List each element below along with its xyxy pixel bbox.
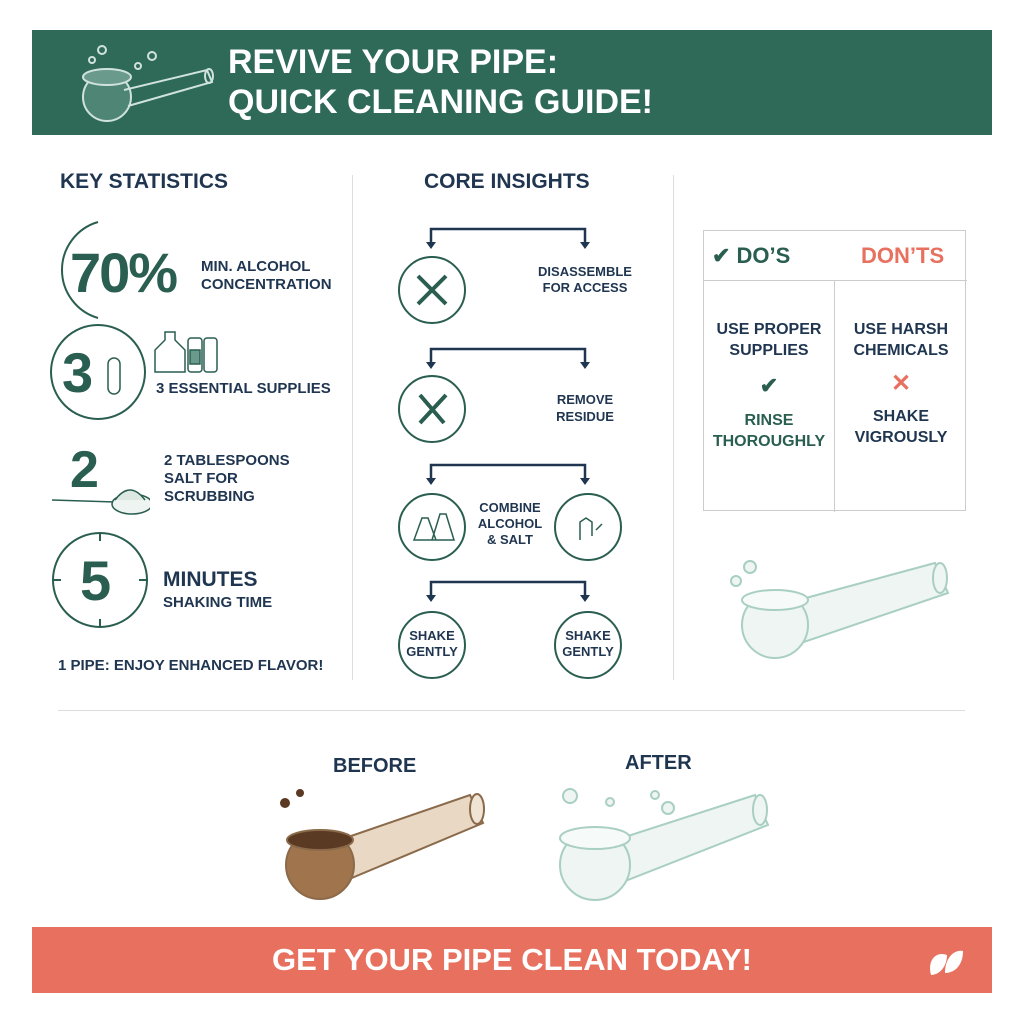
stat: 2 tablespoons: 2 TABLESPOONS [164, 452, 290, 469]
do items: USE PROPER [717, 321, 821, 338]
illustration: dirty pipe [280, 789, 485, 900]
call to action banner [32, 927, 992, 993]
icon: header pipe [82, 45, 214, 122]
flow diagram: RESIDUE [556, 409, 614, 424]
stat: 2 tablespoons: SALT FOR [164, 470, 238, 487]
stat: 5 minutes: 5 [80, 549, 111, 612]
stat: 70%: MIN. ALCOHOL [201, 258, 310, 275]
panel: before/after [280, 752, 770, 901]
illustration: clean pipe [559, 788, 770, 901]
title [228, 43, 653, 121]
stat: 2 tablespoons [52, 441, 290, 515]
label: after: AFTER [625, 752, 692, 774]
don't items: VIGROUSLY [855, 429, 947, 446]
stat: 3 supplies [50, 324, 331, 420]
stat: 70% [61, 221, 332, 319]
heading: do's: ✔ DO’S [712, 243, 790, 268]
panel: core insights [398, 170, 632, 679]
do items: SUPPLIES RINSE [729, 342, 809, 429]
illustration: clean pipe right [730, 560, 950, 659]
stat: 2 tablespoons: SCRUBBING [164, 488, 255, 505]
flow diagram: REMOVE [557, 392, 613, 407]
flow diagram: COMBINE [479, 500, 541, 515]
don't items [853, 321, 949, 446]
panel: do's and don'ts table [703, 230, 966, 511]
header banner [32, 30, 992, 135]
heading: core insights: CORE INSIGHTS [424, 170, 590, 193]
stat: 5 minutes: MINUTES [163, 568, 258, 591]
flow diagram [398, 228, 632, 679]
title: QUICK CLEANING GUIDE! [228, 83, 653, 121]
title: REVIVE YOUR PIPE: [228, 43, 558, 81]
stat: 3 supplies: 3 ESSENTIAL SUPPLIES [156, 380, 331, 397]
flow diagram: & SALT [487, 532, 533, 547]
heading: don'ts: DON’TS [861, 243, 944, 268]
flow diagram: GENTLY [406, 644, 458, 659]
don't items: USE HARSH [854, 321, 948, 338]
text: enjoy flavor: 1 PIPE: ENJOY ENHANCED FLAVOR! [58, 657, 323, 674]
flow diagram: SHAKE [409, 628, 455, 643]
flow diagram: SHAKE [565, 628, 611, 643]
icon: leaves [930, 950, 963, 975]
do items: ✔ [760, 373, 778, 398]
label: before: BEFORE [333, 755, 416, 777]
stat: 5 minutes [52, 532, 272, 628]
stat: 2 tablespoons: 2 [70, 441, 99, 499]
stat: 70%: CONCENTRATION [201, 276, 332, 293]
flow diagram: GENTLY [562, 644, 614, 659]
stat: 5 minutes: SHAKING TIME [163, 594, 272, 611]
stat: 3 supplies: 3 [62, 341, 93, 404]
heading: key statistics: KEY STATISTICS [60, 170, 228, 193]
flow diagram: FOR ACCESS [543, 280, 628, 295]
flow diagram: ALCOHOL [478, 516, 542, 531]
do items: THOROUGHLY [713, 433, 825, 450]
stat: 70%: 70% [70, 241, 176, 304]
cta text: GET YOUR PIPE CLEAN TODAY! [272, 942, 752, 977]
do items [713, 321, 825, 450]
don't items: CHEMICALS SHAKE [853, 342, 949, 425]
don't items: ✕ [891, 370, 911, 397]
flow diagram: DISASSEMBLE [538, 264, 632, 279]
panel: key statistics [50, 170, 332, 674]
